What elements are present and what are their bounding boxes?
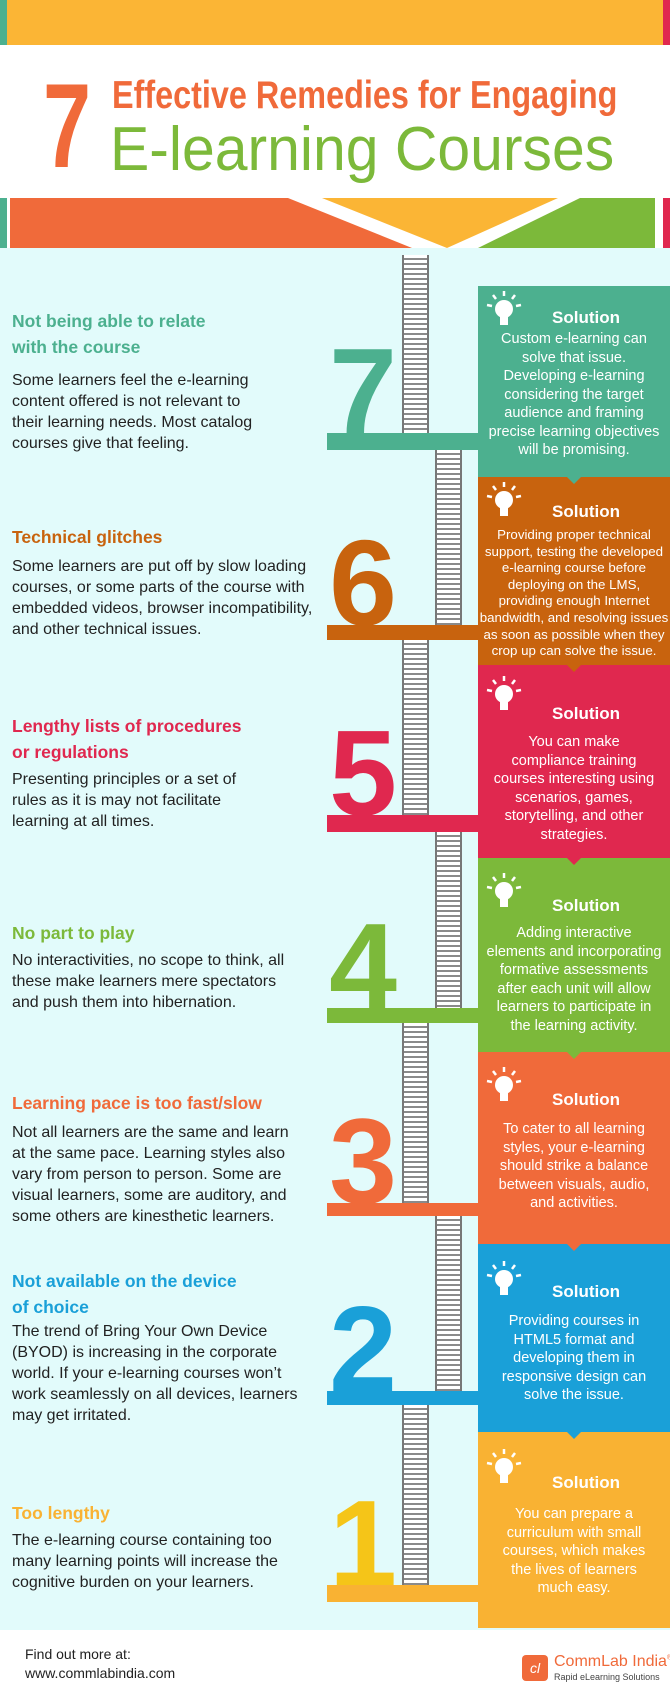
solution box 4: the learning activity. — [510, 1018, 638, 1034]
solution box 2 — [478, 1244, 670, 1432]
text 6: Some learners are put off by slow loading — [12, 558, 306, 575]
solution box 1: You can prepare a — [515, 1506, 633, 1522]
heading 5: Lengthy lists of procedures — [12, 716, 241, 736]
solution box 4: formative assessments — [500, 962, 648, 978]
bulb icon — [486, 1261, 522, 1295]
heading 7: Not being able to relate — [12, 311, 206, 331]
solution box 6: deploying on the LMS, — [508, 577, 640, 592]
title — [43, 59, 617, 193]
text 4: No interactivities, no scope to think, all — [12, 952, 284, 969]
solution box 2: responsive design can — [502, 1368, 646, 1384]
solution box 1: curriculum with small — [507, 1524, 641, 1540]
heading 7 — [12, 311, 206, 357]
solution box 6 — [478, 477, 670, 665]
solution box 5: Solution — [552, 704, 620, 723]
text 6: embedded videos, browser incompatibility, — [12, 600, 312, 617]
text 5: Presenting principles or a set of — [12, 771, 236, 788]
solution box 4: Solution — [552, 896, 620, 915]
title line 1: Effective Remedies for Engaging — [112, 74, 617, 117]
solution box 2: Providing courses in — [509, 1313, 639, 1329]
number 2: 2 — [329, 1281, 397, 1417]
logo icon — [522, 1655, 548, 1681]
solution box 7: considering the target — [504, 386, 644, 402]
solution box 1: courses, which makes — [503, 1543, 645, 1559]
solution box 5 — [478, 665, 670, 858]
solution box 7: solve that issue. — [522, 350, 626, 366]
solution box 3: between visuals, audio, — [499, 1176, 649, 1192]
bulb icon — [486, 482, 522, 516]
solution box 2: HTML5 format and — [514, 1332, 634, 1348]
number 7: 7 — [329, 323, 397, 459]
solution box 6: Providing proper technical — [497, 527, 651, 542]
text 3 — [12, 1124, 289, 1225]
text 3: some others are kinesthetic learners. — [12, 1208, 274, 1225]
footer text — [25, 1646, 175, 1681]
text 1: many learning points will increase the — [12, 1553, 278, 1570]
text 4: and push them into hibernation. — [12, 994, 236, 1011]
text 3: visual learners, some are auditory, and — [12, 1187, 287, 1204]
solution box 5: scenarios, games, — [515, 790, 633, 806]
number 3: 3 — [329, 1093, 397, 1229]
number 6: 6 — [329, 515, 397, 651]
footer text: Find out more at: — [25, 1646, 131, 1662]
text 6: courses, or some parts of the course with — [12, 579, 305, 596]
step 3 — [12, 1093, 289, 1225]
heading 2: Not available on the device — [12, 1271, 237, 1291]
solution box 2: Solution — [552, 1282, 620, 1301]
solution box 4: learners to participate in — [497, 999, 651, 1015]
heading 6: Technical glitches — [12, 527, 162, 547]
heading 7: with the course — [12, 337, 140, 357]
bulb icon — [486, 1067, 522, 1101]
solution box 3 — [478, 1052, 670, 1244]
text 3: Not all learners are the same and learn — [12, 1124, 289, 1141]
text 1: The e-learning course containing too — [12, 1532, 272, 1549]
solution box 6: support, testing the developed — [485, 544, 663, 559]
solution box 2: developing them in — [513, 1350, 635, 1366]
text 3: vary from person to person. Some are — [12, 1166, 281, 1183]
solution box 6: crop up can solve the issue. — [492, 643, 656, 658]
text 4 — [12, 952, 284, 1011]
solution box 5: compliance training — [512, 752, 636, 768]
solution box 5: You can make — [528, 734, 620, 750]
number 1: 1 — [329, 1475, 397, 1611]
bulb icon — [486, 1449, 522, 1483]
solution box 7: will be promising. — [518, 442, 630, 458]
number 5: 5 — [329, 705, 397, 841]
footer logo: CommLab India® — [554, 1653, 670, 1670]
text 1 — [12, 1532, 278, 1591]
solution box 6: Solution — [552, 502, 620, 521]
solution box 2: solve the issue. — [524, 1387, 624, 1403]
text 7: content offered is not relevant to — [12, 393, 240, 410]
text 5: rules as it is may not facilitate — [12, 792, 221, 809]
bulb icon — [486, 676, 522, 710]
solution box 6: e-learning course before — [502, 560, 646, 575]
text 4: these make learners mere spectators — [12, 973, 276, 990]
number 4: 4 — [329, 898, 397, 1034]
heading 3: Learning pace is too fast/slow — [12, 1093, 262, 1113]
solution box 3: should strike a balance — [500, 1158, 648, 1174]
solution box 5: strategies. — [541, 826, 607, 842]
text 2: (BYOD) is increasing in the corporate — [12, 1344, 277, 1361]
bulb icon — [486, 873, 522, 907]
step 1 — [12, 1503, 278, 1591]
heading 1: Too lengthy — [12, 1503, 110, 1523]
text 5 — [12, 771, 236, 830]
footer logo — [522, 1653, 670, 1682]
heading 5 — [12, 716, 241, 762]
text 2: work seamlessly on all devices, learners — [12, 1386, 297, 1403]
bulb icon — [486, 291, 522, 325]
footer text: www.commlabindia.com — [25, 1665, 175, 1681]
solution box 4: Adding interactive — [516, 925, 632, 941]
solution box 3: styles, your e-learning — [503, 1140, 645, 1156]
solution box 3: and activities. — [530, 1195, 618, 1211]
text 2: may get irritated. — [12, 1407, 131, 1424]
text 7: courses give that feeling. — [12, 435, 189, 452]
text 5: learning at all times. — [12, 813, 154, 830]
text 2: world. If your e-learning courses won’t — [12, 1365, 281, 1382]
text 1: cognitive burden on your learners. — [12, 1574, 254, 1591]
heading 4: No part to play — [12, 923, 135, 943]
solution box 7: Developing e-learning — [503, 368, 645, 384]
step 6 — [12, 527, 312, 638]
solution box 6: bandwidth, and resolving issues — [480, 610, 668, 625]
solution box 7 — [478, 286, 670, 477]
solution box 3: To cater to all learning — [503, 1121, 645, 1137]
title number 7: 7 — [43, 59, 91, 193]
text 7 — [12, 372, 252, 452]
step 4 — [12, 923, 284, 1011]
solution box 7: Custom e-learning can — [501, 331, 647, 347]
solution box 7: precise learning objectives — [489, 424, 659, 440]
ladders — [402, 255, 429, 433]
text 7: Some learners feel the e-learning — [12, 372, 249, 389]
heading 2 — [12, 1271, 237, 1317]
solution box 4: elements and incorporating — [487, 944, 661, 960]
solution box 3: Solution — [552, 1090, 620, 1109]
text 2 — [12, 1323, 297, 1424]
logo icon: cl — [530, 1660, 540, 1676]
heading 5: or regulations — [12, 742, 129, 762]
solution box 1: much easy. — [537, 1580, 611, 1596]
solution box 4: after each unit will allow — [497, 980, 651, 996]
solution box 6: providing enough Internet — [499, 593, 649, 608]
heading 2: of choice — [12, 1297, 89, 1317]
header banner — [0, 198, 670, 248]
title line 2: E-learning Courses — [110, 115, 614, 184]
text 3: at the same pace. Learning styles also — [12, 1145, 285, 1162]
step 5 — [12, 716, 241, 830]
footer logo: Rapid eLearning Solutions — [554, 1672, 660, 1682]
solution box 5: storytelling, and other — [505, 808, 643, 824]
step 2 — [12, 1271, 297, 1424]
solution box 7: Solution — [552, 308, 620, 327]
header top bar — [0, 0, 670, 45]
solution box 5: courses interesting using — [494, 771, 654, 787]
solution box 1: Solution — [552, 1473, 620, 1492]
solution box 7: audience and framing — [504, 405, 644, 421]
solution box 1 — [478, 1432, 670, 1628]
text 2: The trend of Bring Your Own Device — [12, 1323, 267, 1340]
text 6 — [12, 558, 312, 638]
solution box 4 — [478, 858, 670, 1052]
solution box 1: the lives of learners — [511, 1562, 637, 1578]
text 7: their learning needs. Most catalog — [12, 414, 252, 431]
step 7 — [12, 311, 252, 452]
text 6: and other technical issues. — [12, 621, 201, 638]
solution box 6: as soon as possible when they — [483, 627, 665, 642]
